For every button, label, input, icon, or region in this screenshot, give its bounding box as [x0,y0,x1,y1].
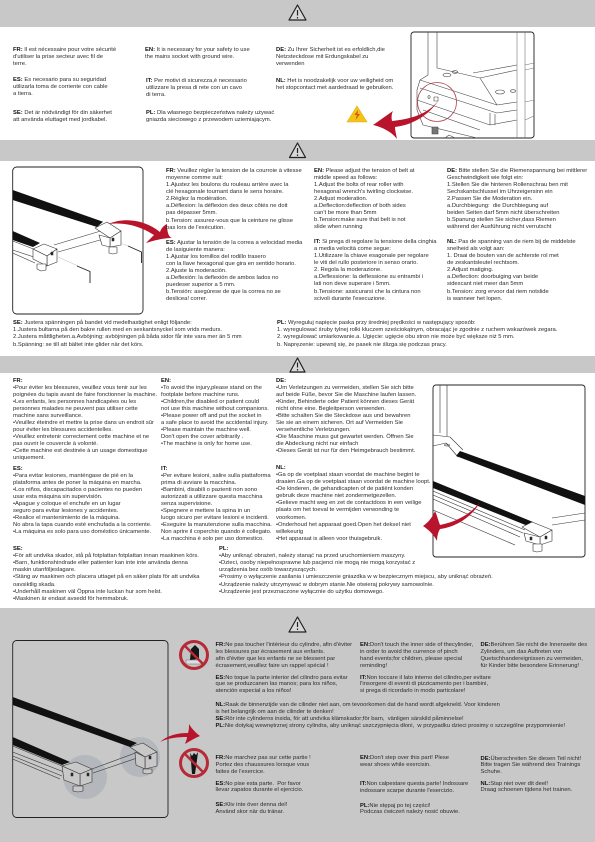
header band 1 [0,0,595,27]
text: section 4 DE step: DE:Überschreiten Sie diesen Teil nicht! Bitte tragen Sie während des Trainings Schuhe. [480,756,581,775]
text: section 4 EN: EN:Don't touch the inner side of thecylinder, in order to avoid the currence of pinch hand events;for children, please special reminding! [360,642,473,669]
text: section 1 PL: PL: Dla własnego bezpieczeństwa należy używać gniazda sieciowego z przewodem uziemiającym. [146,110,274,123]
text: section 3 EN: EN: •To avoid the injury,please stand on the footplate before machine runs. •Children,the disabled or patient could not use this machine without companions. •Please power off and put the socket in a safe place to avoid the accidental injury. •Please maintain the machine well. Don't open the cover arbitrarily . •The machine is only for home use. [161,378,269,447]
icon: no touching cylinder [180,642,208,668]
text: section 2 PL: PL: Wyreguluj napięcie paska przy średniej prędkości w następujący sposób: 1. wyregulować śruby tylnej rolki kluczem sześciokątnym, obracając je zgodnie z ruchem wskazówek zegara. 2. wyregulować umiarkowanie.a. Ugięcie: ugięcie obu stron nie może być większe niż 5 mm. b. Napręzenie: upewnij się, że pasek nie ślizga się podczas pracy. [277,320,557,348]
text: section 2 SE: SE: Justera spänningen på bandet vid medelhastighet enligt följande: 1.Justera bultarna på den bakre rullen med en sexkantsnyckel som vrids medurs. 2.Justera måttligheten.a.Avböjning: avböjningen på båda sidor får inte vara mer än 5 mm b.Spänning: se till att bältet inte glider när det körs. [13,320,242,348]
text: section 4 ES: ES:No toque la parte interior del cilindro para evitar que se produzcanen las manos; para los niños, atención especial a los niños! [216,674,348,694]
text: section 4 PL step: PL:Nie stępaj po tej części! Podczas ćwiczeń należy nosić obuwie. [360,802,460,815]
header band 2 [0,140,595,161]
image: rear roller adjustment [13,167,143,314]
icon: warning triangle 4 [289,617,306,632]
image: power socket on treadmill [411,32,534,138]
text: section 4 DE: DE:Berühren Sie nicht die Innenseite des Zylinders, um das Auftreten von Quetschhandereignissen zu vermeiden, für Kinder bitte besondere Erinnerung! [480,642,587,669]
text: section 3 ES: ES: •Para evitar lesiones, manténgase de pié en la plataforma antes de poner la máquina en marcha. •Los niños, discapacitados o pacientes no pueden usar esta máquina sin supervisión. •Apague y coloque el enchufe en un lugar seguro para evitar lesiones y accidentes. •Realice el mantenimiento de la máquina. No abra la tapa cuando esté enchufada a la corriente. •La máquina es solo para uso doméstico únicamente. [13,466,152,535]
text: section 3 IT: IT: •Per evitare lesioni, salire sulla piattaforma prima di avviare la macchina. •Bambini, disabili o pazienti non sono autorizzati a utilizzare questa macchina senza supervisione. •Spegnere e mettere la spina in un luogo sicuro per evitare lesioni e incidenti. •Eseguire la manutenzione sulla macchina. Non aprire il coperchio quando è collegato. •La macchina è solo per uso domestico. [161,466,272,542]
text: section 4 IT step: IT:Non calpestare questa parte! Indossare indossare scarpe durante l'esercizio. [360,781,468,794]
text: section 3 NL: NL: •Ga op de voetplaat staan voordat de machine begint te draaien.Ga op de voetplaat staan voordat de machine loopt. •De kinderen, de gehandicapten of de patiënt konden gebruik deze machine niet zondermetgezellen. •Gelieve macht weg en zet de contactdoos in een veilige plaats om het toeval te vermijden verwonding te voorkomen. •Onderhoud het apparaat goed.Open het deksel niet willekeurig •Het apparaat is alleen voor thuisgebruik. [276,465,430,542]
icon: warning triangle 3 [290,358,305,372]
text: section 3 PL: PL: •Aby uniknąć obrażeń, należy stanąć na przed uruchomieniem maszyny. •Dzieci, osoby niepełnosprawne lub pacjenci nie mogą nie mogą korzystać z urządzenia bez osób towarzyszących. •Prosimy o wyłączenie zasilania i umieszczenie gniazdka w w bezpiecznym miejscu, aby uniknąć obrażeń. •Urządzenie należy utrzymywać w dobrym stanie.Nie otwieraj pokrywy samowolnie. •Urządzenie jest przeznaczone wyłącznie do użytku domowego. [219,546,493,595]
text: section 3 DE: DE: •Um Verletzungen zu vermeiden, stellen Sie sich bitte auf beide Füße, bevor Sie die Maschine laufen lassen. •Kinder, Behinderte oder Patient können dieses Gerät nicht ohne eine. Begleitperson verwenden. •Bitte schalten Sie die Steckdose aus und bewahren Sie sie an einem sicheren. Ort auf Vermeiden Sie versehentliche Verletzungen. •Die Maschine muss gut gewartet werden. Öffnen Sie die Abdeckung nicht nur einfach •Dieses Gerät ist nur für den Heimgebrauch bestimmt. [276,378,416,454]
arrow: socket to warning [373,100,439,139]
text: section 4 FR step: FR:Ne marchez pas sur cette partie ! Portez des chaussures lorsque vous faites de l'exercice. [216,755,311,775]
text: section 2 DE: DE: Bitte stellen Sie die Riemenspannung bei mittlerer Geschwindigkeit wie folgt ein: 1.Stellen Sie die hinteren Rollenschrau ben mit Sechskantschlussel im Uhrzeigersinn ein 2.Passen Sie die Moderation ein. a.Durchbiegung: die Durchbiegung auf beiden Seiten darf 5mm nicht überschreiten b.Spanung stellen Sie sicher,dass Riemen während der Ausführung nicht verrutscht [447,168,587,230]
text: section 2 IT: IT: Si prega di regolare la tensione della cinghia a media velocità come segue: 1.Utilizzare la chiave esagonale per regolare le viti del rullo posteriore in senso orario. 2. Regola la moderazione. a.Deflessione: la deflessione su entrambi i lati non deve superare i 5mm. b.Tensione: assicurarsi che la cintura non scivoli durante l'esecuzione. [314,239,436,302]
arrow: treadmill to text [423,502,480,541]
text: section 4 EN step: EN:Don't step over this part! Plese wear shoes while exercisin. [360,755,449,768]
icon: warning triangle 2 [290,143,306,158]
icon: warning triangle 1 [289,5,306,20]
text: section 4 IT: IT:Non toccare il lato interno del cilindro,per evitare l'insorgere di eventi di pizzicamento per i bambini, si prega di ricordarlo in modo particolare! [360,674,491,694]
text: section 4 NL step: NL:Stap niet over dit deel! Draag schoenen tijdens het trainen. [480,780,572,793]
text: section 3 FR: FR: •Pour éviter les blessures, veuillez vous tenir sur les poignées du tapis avant de faire fonctionner la machine. •Les enfants, les personnes handicapées ou les personnes malades ne peuvent pas utiliser cette machine sans surveillance. •Veuillez éteindre et mettre la prise dans un endroit sûr pour éviter les blessures accidentelles. •Veuillez entretenir correctement cette machine et ne pas ouvrir le couvercle à volonté. •Cette machine est destinée à un usage domestique uniquement. [13,378,157,461]
text: section 3 SE: SE: •För att undvika skador, stå på fotplattan fotplattan innan maskinen körs. •Barn, funktionshindrade eller patienter kan inte inte använda denna maskin utanföljeslagare. •Stäng av maskinen och placera uttaget på en säker plats för att undvika oavsiktlig skada. •Underhåll maskinen väl Öppna inte luckan hur som helst. •Maskinen är endast avsedd för hemmabruk. [13,546,200,602]
image: treadmill front [433,385,585,557]
text: section 1 SE: SE: Det är nödvändigt för din säkerhet att använda eluttaget med jordkabel. [13,110,112,123]
text: section 2 FR: FR: Veuillez régler la tension de la courroie à vitesse moyenne comme suit: 1.Ajustez les boulons du rouleau arrière avec la clé hexagonale tournant dans le sens horaire. 2.Réglez la modération. a.Déflexion: la déflexion des deux côtés ne doit pas dépasser 5mm. b.Tension: assurez-vous que la ceinture ne glisse pas lors de l'exécution. [166,168,302,231]
image: cylinder pinch points [13,640,168,818]
text: section 2 EN: EN: Please adjust the tension of belt at middle speed as follows: 1.Adjust the bolts of rear roller with hexagonal wrench's twirling clockwise. 2.Adjust moderation. a.Deflection:deflection of both sides can't be more than 5mm b.Tension:make sure that belt is not slide when running [314,168,414,230]
text: section 2 NL: NL: Pas de spanning van de riem bij de middelste snelheid als volgt aan: 1. Draai de bouten van de achterste rol met de zeskantsleutel rechtsom. 2.Adjust matiging. a.Deflection: doorbuiging van beide sidescant niet meer dan 5mm b.Tension: zorg ervoor dat riem notslide is wanneer het lopen. [447,239,576,302]
arrow: cylinder to warnings [160,724,200,744]
text: section 1 NL: NL: Het is noodzakelijk voor uw veiligheid om het stopcontact met aardedraad te gebruiken. [276,78,393,91]
text: section 4 FR: FR:Ne pas toucher l'intérieur du cylindre, afin d'éviter les blessures par écrasement aux enfants. afin d'éviter que les enfants ne se blessent par écrasement,veuillez faire un rappel spécial ! [216,642,352,669]
text: section 1 EN: EN: It is necessary for your safety to use the mains socket with ground wire. [145,46,250,60]
text: section 2 ES: ES: Ajustar la tensión de la correa a velocidad media de lasiguiente manera: 1.Ajustar los tornillos del rodillo trasero con la llave hexagonal que gira en sentido horario. 2.Ajuste la moderación. a.Deflexión: la deflexión de ambos lados no puedeser superior a 5 mm. b.Tensión: asegúrese de que la correa no se deslicea! correr. [166,240,302,302]
text: section 1 FR: FR: Il est nécessaire pour votre sécurité d'utiliser la prise secteur avec fil de terre. [13,46,116,67]
icon: high voltage [347,106,367,122]
text: section 1 IT: IT: Per motivi di sicurezza,è necessario utilizzare la presa di rete con un cavo di terra. [146,78,247,98]
panel background: cylinder warning [0,608,595,842]
header band 3 [0,356,595,373]
text: section 4 SE step: SE:Kliv inte över denna del! Använd skor när du tränar. [216,802,287,815]
text: section 4 ES step: ES:No pise esta parte. Por favor llevar zapatos durante el ejercicio. [216,780,303,793]
text: section 4 NL SE PL: NL:Raak de binnenzijde van de cilinder niet aan, om tevoorkomen dat de hand wordt afgekneld. Voor kinderen is het belangrijk om aan de cilinder te denken! SE:Rör inte cylinderns insida, för att undvika klämskador;för barn, vänligen särskild påminnelse! PL:Nie dotykaj wewnętrznej strony cylindra, aby uniknąć uszczypnięcia dłoni, w przypadku dzieci prosimy o szczególne przypomnienie! [216,702,565,729]
arrow: roller to text [108,220,172,243]
text: section 1 DE: DE: Zu Ihrer Sicherheit ist es erfoldlich,die Netzsteckdose mit Erdungskabel zu verwenden [276,46,385,67]
icon: no stepping [180,750,208,776]
text: section 1 ES: ES: Es necesario para su seguridad utilizarla toma de corriente con cable a tierra. [13,77,108,97]
